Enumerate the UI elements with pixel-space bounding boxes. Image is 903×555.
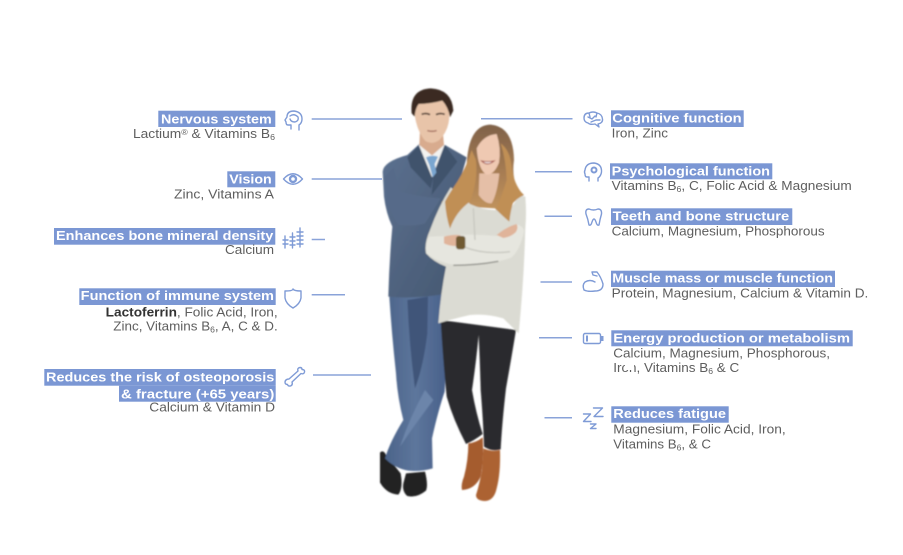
callout: fatigue — [584, 406, 786, 452]
woman jeans — [441, 320, 516, 450]
man shirt and tie — [419, 145, 445, 177]
heading: Enhances bone mineral density — [56, 228, 274, 243]
callout: immune system — [79, 288, 301, 335]
nutrients: Calcium, Magnesium, Phosphorous — [612, 224, 825, 238]
heading: Psychological function — [612, 163, 770, 178]
heading: Cognitive function — [612, 111, 742, 126]
nutrients: Lactium — [133, 127, 177, 141]
nutrients line 2: 6 — [677, 443, 682, 452]
icon: battery — [584, 334, 604, 344]
nutrients: Vitamins B — [612, 179, 671, 193]
heading: Energy production or metabolism — [613, 330, 850, 345]
connector lines — [312, 119, 572, 418]
heading: Reduces fatigue — [613, 406, 726, 421]
heading: Reduces the risk of osteoporosis — [46, 370, 274, 385]
nutrients line 1: Lactoferrin , Folic Acid, Iron, — [106, 306, 278, 320]
man shoes — [380, 451, 427, 497]
man jacket — [383, 144, 467, 297]
man trousers — [385, 293, 446, 471]
nutrients line 2: Zinc, Vitamins B — [113, 320, 203, 334]
nutrients: 6 — [677, 185, 682, 194]
nutrients line 2: , A, C & D. — [215, 320, 278, 334]
nutrients: , C, Folic Acid & Magnesium — [681, 179, 852, 193]
heading: Nervous system — [161, 112, 272, 126]
icon: shield — [285, 289, 301, 308]
nutrients line 1: Calcium, Magnesium, Phosphorous, — [613, 346, 830, 360]
nutrients: Calcium & Vitamin D — [149, 401, 275, 415]
woman hands and watch — [444, 224, 517, 246]
icon: flexed arm — [583, 272, 603, 291]
nutrients line 2: 6 — [708, 367, 714, 376]
callout: bone mineral density — [54, 228, 303, 257]
callout: muscle — [583, 270, 868, 300]
nutrients: 6 — [270, 133, 276, 142]
nutrients: Zinc, Vitamins A — [174, 188, 275, 202]
man neck and face — [419, 130, 444, 155]
woman hair back — [442, 125, 524, 230]
nutrients line 2: 6 — [210, 326, 216, 335]
heading: Muscle mass or muscle function — [612, 270, 833, 285]
callout: osteoporosis — [44, 368, 305, 415]
nutrients: & Vitamins B — [188, 127, 270, 141]
man — [380, 88, 467, 497]
callout: teeth and bone structure — [586, 208, 825, 238]
icon: brain — [584, 112, 603, 127]
heading — [44, 369, 276, 402]
callout: vision — [174, 171, 302, 202]
heading: Teeth and bone structure — [613, 208, 789, 223]
nutrients: Iron, Zinc — [612, 126, 668, 140]
icon: eye — [284, 174, 302, 184]
nutrients line 2: , & C — [681, 437, 711, 451]
woman face — [477, 134, 500, 175]
icon: sleep z letters — [584, 408, 603, 428]
callout: cognitive function — [584, 110, 744, 140]
nutrients line 2: & C — [713, 361, 739, 375]
icon: tooth — [586, 209, 602, 225]
callout: nervous system — [133, 111, 302, 142]
callout: psychological function — [584, 163, 852, 194]
woman neck — [479, 173, 499, 203]
icon: head — [285, 111, 302, 130]
heading: & fracture (+65 years) — [121, 386, 274, 401]
photo: man and woman standing — [380, 88, 526, 501]
nutrients line 1: Magnesium, Folic Acid, Iron, — [613, 422, 786, 436]
nutrients line 2: Vitamins B — [613, 437, 673, 451]
icon: bone — [285, 368, 305, 386]
nutrients: Protein, Magnesium, Calcium & Vitamin D. — [612, 286, 868, 300]
heading: Function of immune system — [81, 288, 274, 303]
nutrients line 2: Iron, Vitamins B — [613, 361, 701, 375]
nutrients: Calcium — [225, 243, 274, 257]
woman sweater — [425, 187, 526, 333]
icon: wheat — [283, 228, 303, 248]
callout: energy — [584, 330, 853, 376]
man hair — [411, 88, 453, 117]
icon: head with gear — [584, 163, 602, 181]
woman boots — [462, 437, 483, 490]
woman — [425, 125, 526, 501]
woman hair front — [445, 150, 477, 229]
heading: Vision — [229, 171, 272, 186]
nutrients: ® — [181, 128, 188, 137]
man facial features — [422, 114, 445, 115]
